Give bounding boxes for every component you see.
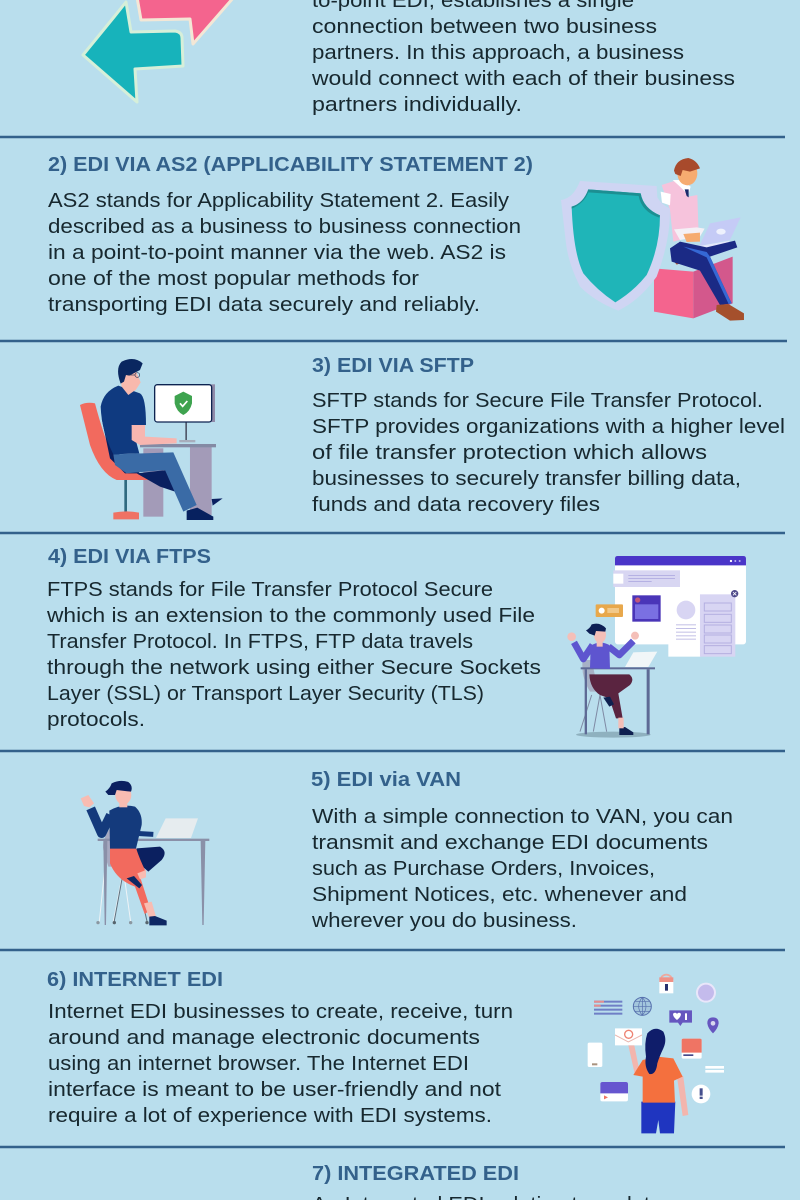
heading: section 6: 6) INTERNET EDI	[47, 968, 223, 991]
text: section 6 description: Internet EDI businesses to create, receive, turn	[48, 1000, 513, 1023]
text: section 5 description	[311, 805, 733, 932]
text: section 2 description: AS2 stands for Applicability Statement 2. Easily	[48, 189, 510, 212]
text: section 1 description: partners individually.	[312, 93, 522, 116]
heading: section 5: 5) EDI via VAN	[311, 768, 461, 791]
icon: exchange arrows	[83, 0, 234, 102]
text: section 4 description	[46, 578, 541, 731]
panel: section 5 EDI via VAN	[81, 768, 733, 932]
text: section 3 description: of file transfer protection which allows	[312, 441, 707, 464]
text: section 2 description: described as a business to business connection	[48, 215, 521, 238]
panel: section 2 EDI via AS2	[48, 153, 744, 321]
text: section 4 description: Layer (SSL) or Transport Layer Security (TLS)	[47, 682, 484, 705]
icon: man with laptop beside shield	[561, 158, 744, 321]
text: section 1 description: connection between two business	[312, 15, 657, 38]
text: section 2 description: transporting EDI data securely and reliably.	[48, 293, 480, 316]
text: section 3 description: SFTP stands for Secure File Transfer Protocol.	[312, 389, 763, 412]
text: section 5 description: With a simple connection to VAN, you can	[312, 805, 733, 828]
text: section 4 description: Transfer Protocol. In FTPS, FTP data travels	[47, 630, 473, 653]
text: section 4 description: which is an extension to the commonly used File	[46, 604, 535, 627]
text: section 3 description	[312, 389, 785, 516]
text: section 3 description: businesses to securely transfer billing data,	[312, 467, 741, 490]
text: section 1 description	[311, 0, 735, 116]
text: section 6 description: require a lot of experience with EDI systems.	[48, 1104, 492, 1127]
text: section 5 description: such as Purchase Orders, Invoices,	[312, 857, 655, 880]
text: section 1 description: partners. In this approach, a business	[312, 41, 684, 64]
text: section 5 description: Shipment Notices, etc. whenever and	[312, 883, 687, 906]
text: section 2 description: one of the most popular methods for	[48, 267, 419, 290]
text: section 1 description: would connect with each of their business	[311, 67, 735, 90]
text: section 5 description: wherever you do business.	[311, 909, 577, 932]
text: section 5 description: transmit and exchange EDI documents	[312, 831, 708, 854]
text: section 6 description: using an internet browser. The Internet EDI	[48, 1052, 469, 1075]
heading: section 7: 7) INTEGRATED EDI	[312, 1162, 519, 1185]
text: section 4 description: protocols.	[47, 708, 145, 731]
panel: section 6 Internet EDI	[47, 968, 724, 1133]
panel: section 3 EDI via SFTP	[80, 354, 785, 520]
text: section 6 description	[48, 1000, 513, 1127]
text: section 3 description: SFTP provides organizations with a higher level	[312, 415, 785, 438]
text: section 2 description	[48, 189, 521, 316]
panel: section 1 point-to-point EDI	[83, 0, 735, 116]
icon: man at desk with secure monitor	[80, 359, 223, 520]
panel: section 4 EDI via FTPS	[46, 545, 746, 738]
text: section 6 description: interface is meant to be user-friendly and not	[48, 1078, 501, 1101]
icon: woman seated at laptop	[81, 781, 209, 925]
text: section 3 description: funds and data recovery files	[312, 493, 600, 516]
icon: woman surrounded by web icons	[588, 975, 724, 1133]
text: section 4 description: through the network using either Secure Sockets	[47, 656, 541, 679]
text: section 6 description: around and manage electronic documents	[48, 1026, 480, 1049]
heading: section 4: 4) EDI VIA FTPS	[48, 545, 211, 568]
icon: woman with web interface	[567, 556, 746, 738]
heading: section 3: 3) EDI VIA SFTP	[312, 354, 474, 377]
heading: section 2: 2) EDI VIA AS2 (APPLICABILITY STATEMENT 2)	[48, 153, 533, 176]
text: section 4 description: FTPS stands for File Transfer Protocol Secure	[47, 578, 493, 601]
text: section 2 description: in a point-to-point manner via the web. AS2 is	[48, 241, 506, 264]
panel: section 7 Integrated EDI	[312, 1162, 662, 1200]
